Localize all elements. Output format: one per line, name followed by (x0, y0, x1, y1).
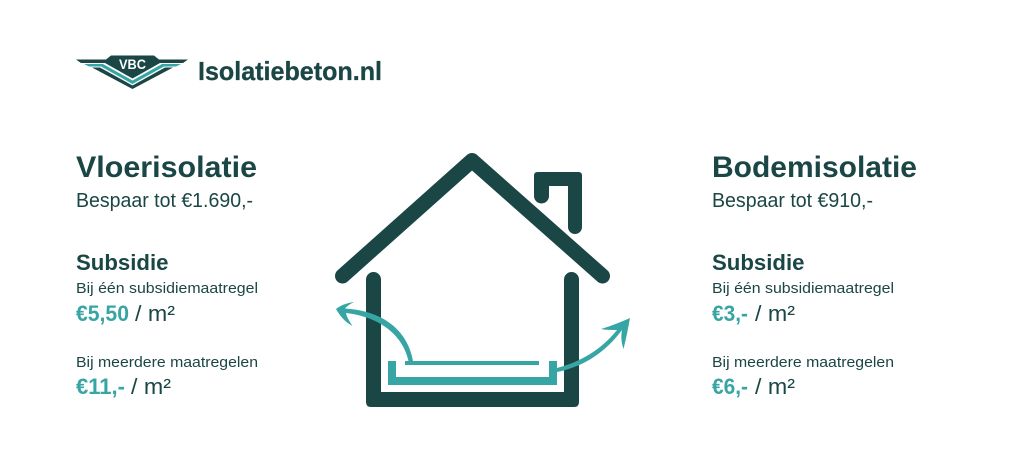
price: multiple measures (76, 374, 171, 399)
savings text: Bespaar tot €1.690,- (76, 190, 253, 212)
arrow: heat escaping right (557, 318, 630, 372)
logo: VBC wings and wordmark (76, 56, 382, 89)
label: single measure: Bij één subsidiemaatregel (76, 280, 258, 297)
icon: roof (342, 160, 602, 276)
price: single measure (76, 301, 175, 326)
price: multiple measures (712, 374, 795, 399)
icon: VBC wing emblem: VBC (119, 57, 146, 72)
label: single measure: Bij één subsidiemaatregel (712, 280, 894, 297)
heading: subsidie: Subsidie (712, 250, 804, 275)
heading: subsidie: Subsidie (76, 250, 168, 275)
price: single measure: €3,- (712, 301, 748, 326)
arrow: heat escaping left (336, 302, 413, 361)
icon: chimney (534, 172, 582, 234)
savings text: Bespaar tot €910,- (712, 190, 873, 212)
icon: VBC wing emblem (76, 56, 188, 89)
heading: vloerisolatie: Vloerisolatie (76, 151, 257, 184)
price: single measure: €5,50 (76, 301, 129, 326)
price: multiple measures: €11,- (76, 374, 125, 399)
house illustration (336, 160, 630, 407)
icon: teal ground insulation tray (388, 361, 557, 385)
price: multiple measures: / m² (755, 374, 795, 399)
icon: walls and floor (366, 272, 579, 407)
price: multiple measures: €6,- (712, 374, 748, 399)
panel: vloerisolatie (76, 151, 258, 399)
heading: bodemisolatie: Bodemisolatie (712, 151, 917, 184)
label: multiple measures: Bij meerdere maatregelen (712, 354, 894, 371)
price: single measure: / m² (755, 301, 795, 326)
icon: teal floor insulation plate (405, 361, 539, 365)
price: multiple measures: / m² (131, 374, 171, 399)
price: single measure: / m² (135, 301, 175, 326)
label: multiple measures: Bij meerdere maatregelen (76, 354, 258, 371)
price: single measure (712, 301, 795, 326)
panel: bodemisolatie (712, 151, 917, 399)
logo wordmark: Isolatiebeton.nl (198, 56, 382, 86)
